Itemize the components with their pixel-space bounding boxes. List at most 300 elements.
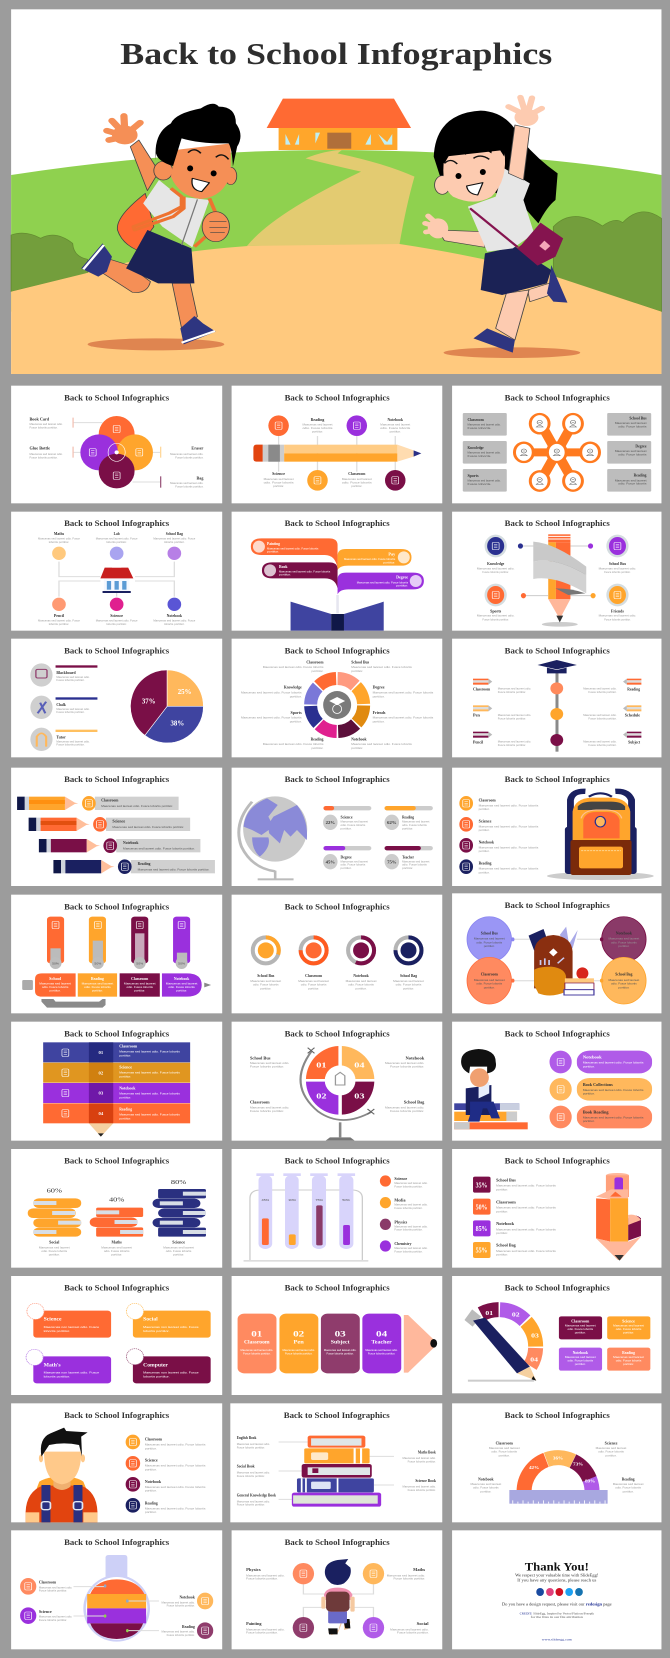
panel: backpack circles	[452, 893, 661, 1013]
cards: odio. Fusce lobortis	[616, 1327, 642, 1331]
labels: porttitor.	[273, 484, 284, 488]
labels	[326, 815, 429, 870]
sand ground	[11, 244, 661, 374]
arc numbers	[485, 1311, 539, 1363]
legend	[380, 1175, 428, 1253]
labels: Maecenas sed laoreet odio.	[250, 1061, 289, 1065]
list items: Maecenas sed laoreet odio. Fusce lobortis	[479, 846, 539, 849]
side items: Fusce lobortis porttitor.	[39, 1618, 67, 1622]
labels: porttitor.	[373, 720, 385, 724]
open book	[291, 595, 384, 631]
rack and tubes: 45%	[262, 1198, 269, 1202]
panel: book pile	[230, 1403, 442, 1522]
labels: Maecenas sed laoreet	[402, 820, 429, 824]
list	[126, 1435, 206, 1514]
labels: Classroom	[467, 418, 484, 422]
math card: Maecenas non laoreet odio. Fusce	[44, 1371, 99, 1375]
labels: odio. Fusce lobortis	[476, 982, 502, 986]
labels: Maecenas sed laoreet odio.	[498, 713, 531, 717]
labels: Fusce lobortis.	[467, 426, 491, 430]
legend items	[30, 663, 97, 751]
legend: Fusce lobortis porttitor.	[394, 1228, 423, 1232]
cards: odio. Fusce lobortis	[567, 1359, 593, 1362]
pencil row 2: Maecenas sed laoreet odio. Fusce lobortis porttitor.	[112, 825, 184, 829]
labels: odio. Fusce lobortis	[598, 1450, 624, 1454]
list items: Science	[479, 819, 492, 823]
list: Maecenas sed laoreet odio. Fusce lobortis	[145, 1464, 206, 1468]
list: Notebook	[145, 1480, 162, 1484]
numbered blocks: 02	[293, 1329, 304, 1339]
list items: Maecenas sed laoreet odio. Fusce lobortis	[479, 867, 539, 871]
labels: Maecenas sed laoreet odio. Fusce	[38, 537, 80, 541]
band labels: Maecenas sed laoreet odio. Fusce lobortis	[119, 1050, 180, 1054]
body labels: Reading	[91, 977, 105, 981]
labels: School Bus	[609, 562, 626, 566]
labels: Maecenas sed laoreet odio.	[583, 740, 617, 743]
globe quadrants: 02	[316, 1091, 326, 1100]
labels: Maecenas sed laoreet	[608, 937, 639, 941]
labels: Reading	[402, 815, 415, 820]
labels: 22%	[326, 821, 335, 825]
labels	[470, 1441, 644, 1493]
labels: Maecenas sed laoreet odio. Fusce	[38, 619, 80, 623]
labels: odio. Fusce lobortis	[348, 983, 374, 987]
computer card: lobortis porttitor.	[143, 1375, 170, 1379]
band labels: 04	[98, 1112, 104, 1116]
icons	[268, 415, 406, 491]
tubes	[47, 917, 190, 969]
labels: Maecenas sed laoreet	[342, 477, 372, 481]
gauge percentages: 36%	[553, 1456, 563, 1460]
panel: hero illustration	[11, 9, 661, 374]
message: If you have any questions, please reach us	[517, 1578, 597, 1583]
labels	[29, 417, 204, 489]
labels: Maecenas sed laoreet	[264, 477, 294, 481]
pills	[550, 1051, 652, 1128]
labels: odio. Fusce lobortis	[253, 983, 279, 987]
labels: porttitor.	[173, 1253, 184, 1257]
side items: Maecenas sed laoreet odio.	[39, 1586, 72, 1589]
labels: Maecenas sed laoreet odio.	[403, 1456, 436, 1460]
band labels: 01	[98, 1051, 103, 1055]
slide title: Back to School Infographics	[505, 775, 610, 785]
labels	[473, 687, 641, 747]
title: Back to School Infographics	[120, 36, 552, 71]
bubble text: porttitor.	[279, 573, 291, 577]
girl character	[425, 97, 580, 358]
boy on books	[454, 1049, 528, 1129]
donut amber	[253, 937, 279, 963]
body labels: School	[49, 977, 62, 981]
labels: Maecenas sed laoreet odio.	[403, 1485, 436, 1489]
labels: Bag	[197, 476, 204, 480]
labels: Friends	[611, 609, 624, 613]
numbered blocks: Classroom	[244, 1340, 270, 1345]
labels: School Bus	[481, 931, 498, 935]
list: porttitor.	[145, 1447, 157, 1450]
labels: Science	[110, 614, 123, 618]
labels	[264, 418, 410, 488]
band labels: 03	[98, 1091, 103, 1096]
body labels: porttitor.	[176, 989, 187, 993]
slide title: Back to School Infographics	[285, 902, 390, 912]
percent list: School Bus	[496, 1178, 516, 1182]
labels: Maecenas sed laoreet odio.	[498, 740, 531, 743]
list items: Maecenas sed laoreet odio. Fusce lobortis	[479, 825, 539, 828]
pie chart: 25%	[178, 687, 191, 696]
globe quadrants	[301, 1046, 374, 1141]
band labels: Classroom	[119, 1044, 138, 1049]
side items: Maecenas sed laoreet odio.	[162, 1601, 195, 1604]
labels: Fusce lobortis porttitor.	[246, 1577, 278, 1581]
icons	[52, 547, 181, 611]
labels: odio. Fusce lobortis	[104, 1249, 130, 1253]
band labels: porttitor.	[119, 1054, 131, 1057]
labels: School Bus	[629, 416, 647, 420]
rack and tubes: 50%	[342, 1198, 350, 1202]
slide title: Back to School Infographics	[64, 519, 169, 529]
labels	[250, 974, 424, 990]
labels: Classroom	[473, 687, 491, 691]
labels: Maecenas sed laoreet odio.	[599, 614, 636, 618]
rack and tubes	[244, 1173, 368, 1262]
labels: porttitor.	[356, 987, 367, 990]
labels: Science	[272, 472, 285, 476]
cards: Science	[622, 1319, 635, 1324]
labels: Maecenas sed laoreet odio.	[385, 1106, 424, 1109]
legend: Maecenas sed laoreet odio.	[394, 1246, 428, 1250]
labels: Notebook	[478, 1477, 494, 1481]
labels: Knowledge	[284, 685, 302, 690]
labels: porttitor.	[402, 827, 413, 830]
cards: Maecenas sed laoreet	[565, 1355, 596, 1359]
website: www.slideegg.com	[542, 1638, 572, 1642]
list items: porttitor.	[479, 828, 490, 832]
labels: Friends	[373, 711, 386, 715]
books	[279, 1436, 394, 1507]
labels: Fusce lobortis porttitor.	[237, 1503, 265, 1507]
bubble text: Degree	[396, 575, 408, 580]
math card: lobortis porttitor.	[44, 1375, 70, 1379]
labels: Reading	[627, 687, 641, 691]
panel: flower hub	[452, 386, 661, 503]
pencil	[464, 1309, 536, 1382]
slide title: Back to School Infographics	[285, 1538, 390, 1548]
labels: odio. Fusce lobortis	[402, 863, 427, 867]
body labels: Maecenas sed laoreet	[166, 982, 197, 986]
labels: Maecenas sed laoreet odio.	[250, 1106, 289, 1109]
labels: porttitor.	[312, 430, 323, 434]
labels: Fusce lobortis porttitor.	[29, 426, 58, 429]
list items: Classroom	[479, 798, 496, 802]
labels: Reading	[622, 1477, 635, 1481]
mini pencils	[473, 679, 641, 738]
list: Classroom	[145, 1437, 162, 1442]
labels: Eraser	[191, 446, 204, 451]
slide title: Back to School Infographics	[505, 393, 610, 403]
arc gauge	[446, 1294, 551, 1399]
side items: Maecenas sed laoreet odio.	[39, 1615, 72, 1619]
band labels: porttitor.	[119, 1096, 131, 1099]
numbered blocks: 03	[335, 1329, 346, 1339]
icons	[293, 1563, 384, 1638]
labels: 75%	[387, 860, 397, 864]
bubble text: Maecenas sed laoreet odio. Fusce lobortis	[267, 547, 319, 550]
slide title: Back to School Infographics	[64, 1284, 169, 1293]
panel: student portrait	[11, 1403, 222, 1522]
slide title: Back to School Infographics	[285, 646, 390, 656]
pencil row 2: Science	[112, 819, 125, 824]
labels: odio. Fusce lobortis	[303, 426, 333, 430]
body labels: odio. Fusce lobortis	[42, 985, 69, 989]
credit: CREDIT: SlideEgg, Inspired by Vector/Flaticon/Freepik	[520, 1612, 594, 1616]
side items: Fusce lobortis porttitor.	[167, 1604, 195, 1608]
labels: Fusce lobortis porttitor.	[394, 1577, 425, 1581]
labels: porttitor.	[290, 720, 302, 724]
labels: Pencil	[54, 614, 65, 618]
labels: Maths	[54, 532, 64, 536]
labels	[38, 532, 195, 626]
band labels: 02	[98, 1071, 103, 1075]
labels: odio. Fusce lobortis	[611, 982, 637, 986]
band labels: porttitor.	[119, 1117, 131, 1120]
legend: Fusce lobortis porttitor.	[394, 1185, 423, 1188]
labels: odio. Fusce lobortis	[380, 426, 410, 430]
pencil row 1: Classroom	[101, 798, 119, 803]
labels: odio. Fusce lobortis	[618, 425, 647, 428]
globe quadrants: 03	[354, 1091, 364, 1100]
list: Maecenas sed laoreet odio. Fusce lobortis	[145, 1507, 206, 1510]
list: Maecenas sed laoreet odio. Fusce lobortis	[145, 1443, 206, 1447]
list: Reading	[145, 1501, 158, 1505]
percent list: 55%	[476, 1246, 488, 1254]
labels: Maecenas sed laoreet	[163, 1246, 194, 1249]
backpack with supplies	[529, 927, 594, 995]
labels: lobortis porttitor.	[164, 622, 185, 626]
rack and tubes: 75%	[315, 1198, 323, 1202]
numbered blocks: Fusce lobortis porttitor.	[326, 1352, 354, 1356]
legend items: Blackboard	[56, 671, 76, 675]
pencil row 3	[39, 838, 200, 853]
message	[515, 1573, 599, 1583]
percent list: School Bag	[496, 1243, 517, 1248]
labels: Maecenas sed laoreet odio.	[477, 567, 515, 570]
globe	[239, 796, 307, 880]
slide title: Back to School Infographics	[64, 1157, 169, 1166]
science card: Maecenas non laoreet odio. Fusce	[44, 1325, 99, 1329]
side items: Classroom	[39, 1580, 56, 1585]
pointers	[73, 1584, 159, 1632]
labels: Sports	[467, 474, 479, 478]
tubes: 50%	[136, 962, 143, 965]
labels: School Bag	[166, 532, 184, 536]
slide title: Back to School Infographics	[505, 901, 610, 911]
stack orange	[90, 1196, 143, 1237]
pills: Book Collections	[583, 1083, 613, 1087]
labels: 62%	[387, 821, 397, 825]
computer card	[126, 1349, 211, 1383]
body labels: odio. Fusce lobortis	[84, 985, 111, 989]
cards: Maecenas sed laoreet	[613, 1324, 644, 1328]
panel: numbered pencil	[232, 1276, 442, 1395]
labels: Maecenas sed laoreet	[298, 979, 329, 983]
labels	[241, 660, 434, 750]
labels: Maecenas sed laoreet	[39, 1246, 70, 1249]
numbered blocks: Maecenas sed laoreet odio.	[324, 1348, 356, 1352]
panel: flask	[11, 1530, 222, 1649]
donut navy	[396, 937, 421, 963]
labels: porttitor.	[351, 484, 362, 488]
labels: School Bus	[351, 660, 370, 664]
cards: Classroom	[571, 1319, 590, 1324]
circles	[467, 917, 646, 1004]
labels: porttitor.	[618, 944, 629, 948]
computer card: Computer	[143, 1363, 169, 1368]
slide title: Back to School Infographics	[505, 646, 610, 656]
labels: Teacher	[402, 855, 414, 859]
labels: Maecenas sed laoreet odio.	[498, 687, 531, 690]
labels	[467, 416, 647, 486]
labels: lobortis porttitor.	[49, 622, 69, 626]
labels: Fusce lobortis porttitor.	[237, 1474, 265, 1478]
labels: porttitor.	[605, 1454, 617, 1457]
labels: Maecenas sed laoreet odio.	[170, 452, 203, 456]
labels: Maecenas sed laoreet	[303, 423, 332, 427]
labels: Book Card	[29, 417, 50, 421]
slide title: Back to School Infographics	[284, 1411, 390, 1421]
gauge percentages: 73%	[573, 1462, 583, 1466]
side items: Fusce lobortis porttitor.	[167, 1633, 195, 1637]
labels: Maecenas sed laoreet odio.	[477, 614, 515, 618]
labels: Maths Book	[418, 1450, 436, 1454]
labels: Maecenas sed laoreet	[393, 979, 424, 983]
body labels: odio. Fusce lobortis	[126, 985, 153, 989]
tubes: 50%	[52, 962, 59, 965]
labels: Subject	[628, 740, 641, 744]
labels: Maecenas sed laoreet	[470, 1482, 501, 1486]
social card: Maecenas non laoreet odio. Fusce	[143, 1325, 199, 1329]
labels: Maecenas sed laoreet odio. Fusce	[153, 619, 195, 623]
slide title: Back to School Infographics	[285, 393, 390, 403]
labels: Lab	[114, 532, 120, 536]
labels: odio. Fusce lobortis	[264, 481, 294, 484]
slide title: Back to School Infographics	[505, 1029, 610, 1039]
slide title: Back to School Infographics	[64, 393, 169, 403]
school building	[267, 99, 411, 150]
labels: Maecenas sed laoreet odio. Fusce	[153, 537, 195, 541]
labels: Maecenas sed laoreet odio.	[29, 422, 63, 426]
labels: porttitor.	[403, 987, 414, 990]
labels: Classroom	[348, 472, 366, 476]
labels: School Bus	[257, 974, 275, 978]
labels: Fusce lobortis porttitor.	[390, 1109, 424, 1113]
social icons	[536, 1588, 583, 1596]
donut maroon	[348, 937, 374, 963]
labels: odio. Fusce lobortis	[166, 1249, 192, 1253]
list: Maecenas sed laoreet odio. Fusce lobortis	[145, 1485, 206, 1489]
list: porttitor.	[145, 1468, 157, 1471]
slide title: Back to School Infographics	[64, 1411, 169, 1421]
labels: odio. Fusce lobortis	[301, 983, 327, 987]
labels: Maecenas sed laoreet odio.	[29, 452, 63, 456]
panel: backpack list	[452, 768, 661, 886]
labels: Maecenas sed laoreet odio.	[237, 1500, 270, 1503]
labels: Notebook	[406, 1056, 425, 1060]
bubble text: Maecenas sed laoreet odio. Fusce lobortis	[344, 557, 395, 561]
labels: Maecenas sed laoreet odio. Fusce lobortis	[351, 665, 412, 669]
labels: Fusce lobortis porttitor.	[588, 717, 617, 721]
gauge arc	[513, 1446, 604, 1537]
numbered blocks: Fusce lobortis porttitor.	[243, 1352, 271, 1356]
labels: Glue Bottle	[29, 446, 50, 451]
body labels: porttitor.	[134, 989, 145, 993]
credit: for the files in our file attribution	[531, 1615, 583, 1619]
labels: porttitor.	[623, 1490, 634, 1493]
labels: Notebook	[351, 737, 367, 741]
labels: Maecenas sed laoreet odio. Fusce	[96, 619, 138, 623]
band labels	[98, 1044, 180, 1120]
band labels: Maecenas sed laoreet odio. Fusce lobortis	[119, 1113, 180, 1117]
pie chart	[130, 670, 203, 743]
percent list: Maecenas sed laoreet odio. Fusce lobortis	[496, 1249, 556, 1253]
pie chart: 37%	[142, 696, 156, 705]
labels: Sports	[490, 609, 502, 613]
credit	[520, 1612, 594, 1619]
labels: Social	[49, 1240, 60, 1244]
labels: Maecenas sed laoreet	[341, 820, 368, 824]
legend items: Maecenas sed laoreet odio.	[56, 675, 90, 679]
percent list: 35%	[476, 1180, 488, 1189]
numbered blocks: Subject	[331, 1340, 350, 1345]
panel: ruler gauge	[452, 1403, 661, 1537]
panel: donut row	[232, 895, 442, 1013]
labels: porttitor.	[373, 695, 385, 698]
percent list: Classroom	[496, 1200, 516, 1204]
numbered blocks: Fusce lobortis porttitor.	[285, 1352, 312, 1356]
percent list: Maecenas sed laoreet odio. Fusce lobortis	[496, 1228, 556, 1231]
band labels: Notebook	[119, 1086, 136, 1091]
list items: Maecenas sed laoreet odio. Fusce lobortis	[479, 804, 539, 807]
labels: Maecenas sed laoreet	[615, 449, 647, 453]
panel: book stacks	[11, 1149, 222, 1268]
percent list: 85%	[476, 1224, 488, 1233]
pencil	[253, 436, 421, 472]
labels: odio. Fusce lobortis	[402, 823, 427, 827]
bubble text: porttitor.	[383, 561, 395, 565]
labels: Maecenas sed laoreet	[615, 479, 647, 482]
labels: Maecenas sed laoreet odio.	[467, 423, 501, 427]
pencil row 4	[53, 859, 215, 874]
labels: Reading	[311, 737, 324, 741]
labels: odio. Fusce lobortis	[396, 983, 422, 987]
panel: thank you	[452, 1530, 661, 1649]
labels: porttitor.	[290, 695, 302, 698]
labels: Classroom	[306, 660, 324, 664]
labels: Maecenas sed laoreet odio. Fusce lobortis	[241, 691, 302, 694]
legend items: Maecenas sed laoreet odio.	[56, 707, 90, 711]
pencil row 1	[17, 796, 179, 811]
connectors	[303, 1584, 373, 1617]
arc numbers: 04	[530, 1357, 539, 1363]
redesign note: Do you have a design request, please visit our redesign page	[502, 1602, 612, 1607]
student figure	[26, 1428, 97, 1522]
labels: Maecenas sed laoreet odio. Fusce lobortis	[351, 742, 412, 746]
flower	[514, 414, 600, 491]
ruler	[509, 1490, 608, 1504]
labels: Classroom	[305, 974, 323, 978]
gauge percentages: 89%	[585, 1479, 595, 1483]
labels: Painting	[246, 1622, 262, 1626]
